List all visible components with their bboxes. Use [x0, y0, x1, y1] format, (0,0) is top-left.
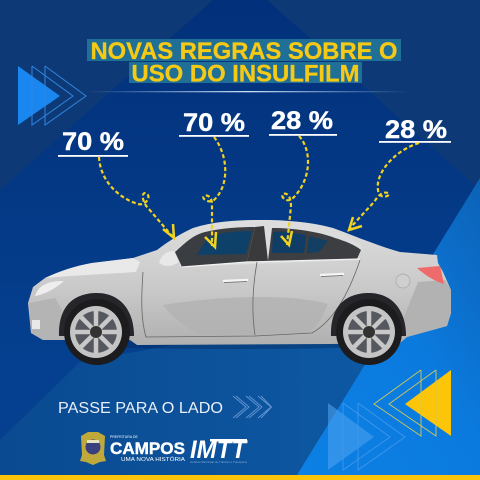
title	[87, 38, 401, 88]
icon: swipe chevrons	[233, 396, 272, 418]
door pillar	[247, 226, 268, 262]
title: USO DO INSULFILM	[132, 60, 360, 88]
lower door shading	[163, 297, 328, 335]
taillight	[417, 266, 444, 284]
car body	[28, 220, 451, 345]
car	[28, 220, 451, 365]
icon: faded blue arrows bottom	[328, 403, 405, 470]
door handles	[224, 274, 343, 281]
logo: campos	[110, 435, 185, 463]
front bumper shade	[29, 298, 62, 340]
fuel cap	[396, 274, 410, 288]
dashed arrow 1	[99, 157, 174, 238]
icon: blue arrows top left	[18, 66, 86, 125]
percent label 3: 28 %	[271, 107, 333, 135]
front window	[175, 227, 255, 267]
front wheel	[59, 293, 134, 365]
swipe text: PASSE PARA O LADO	[58, 400, 223, 417]
percent label 4: 28 %	[385, 116, 447, 144]
logo: IMTT: IMTT	[190, 436, 249, 464]
logo: campos: CAMPOS	[110, 439, 185, 458]
bottom yellow bar	[0, 475, 480, 480]
icon: yellow arrows bottom right	[374, 370, 451, 436]
door lines	[142, 260, 360, 337]
rear wheel	[331, 293, 406, 365]
rear bumper shade	[402, 280, 451, 337]
title: NOVAS REGRAS SOBRE O	[90, 38, 398, 65]
front fog light	[32, 320, 40, 329]
dashed arrow 4	[349, 143, 419, 230]
logo: crest	[80, 432, 106, 465]
logo: campos: PREFEITURA DE	[110, 435, 138, 439]
mirror	[159, 251, 179, 266]
front window glass	[197, 231, 252, 255]
headlight	[35, 281, 64, 296]
dashed arrow 2	[203, 137, 225, 247]
rear window glass	[272, 232, 306, 253]
rear window	[268, 228, 361, 261]
percent label 1: 70 %	[62, 128, 124, 156]
dashed arrow 3	[281, 136, 308, 245]
hood highlight	[45, 258, 140, 278]
window chrome	[182, 259, 360, 267]
car shadow	[85, 341, 385, 349]
logo: IMTT: Instituto Municipal de Trânsito e Transporte	[190, 461, 248, 464]
logo: campos: UMA NOVA HISTÓRIA	[121, 456, 185, 463]
roof band	[175, 222, 362, 267]
percent label 2: 70 %	[183, 109, 245, 137]
